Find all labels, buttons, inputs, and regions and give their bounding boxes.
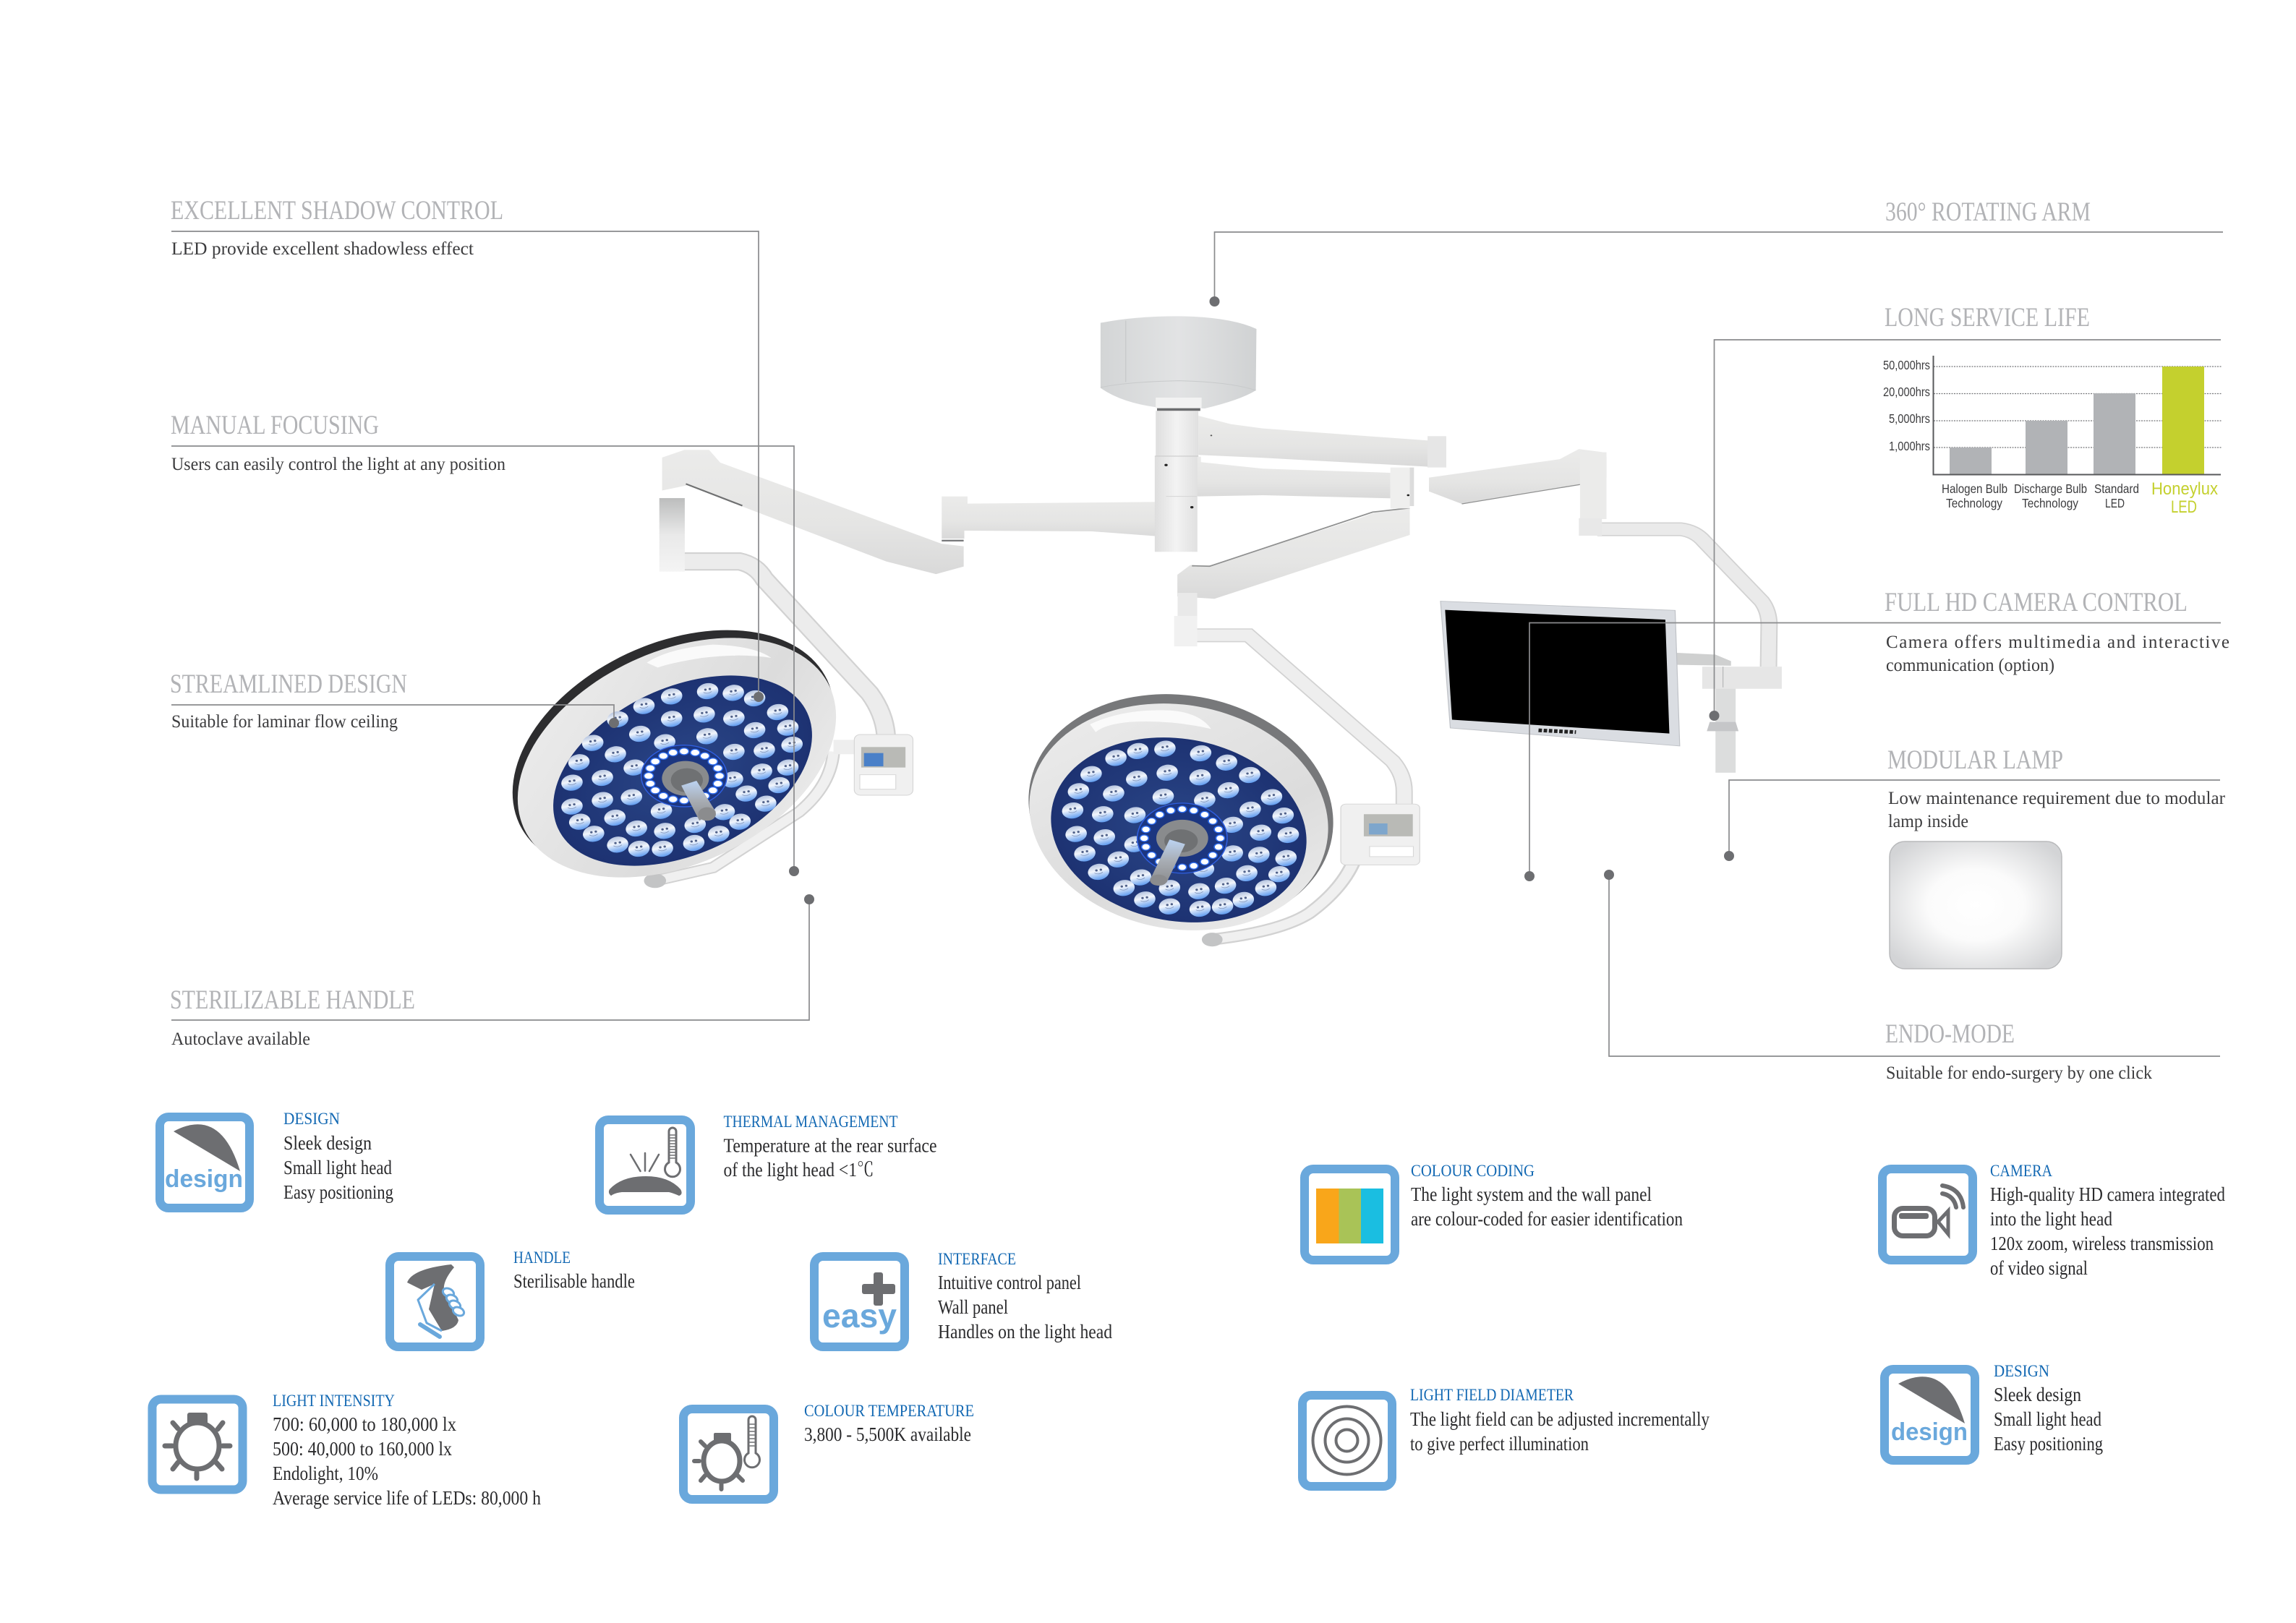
feature title: INTERFACE [938, 1250, 1016, 1268]
feature title: THERMAL MANAGEMENT [723, 1113, 898, 1131]
axis labels: 5,000hrs [1889, 411, 1930, 426]
feature title: DESIGN [1994, 1362, 2049, 1380]
leader line [1215, 232, 2223, 301]
feature text: Endolight, 10% [273, 1463, 378, 1484]
leader dot [1524, 871, 1535, 881]
feature text: The light field can be adjusted incrementally [1410, 1408, 1710, 1430]
callout: streamlined design [170, 669, 619, 732]
feature: colour coding [1305, 1162, 1683, 1260]
icon: handle [390, 1256, 480, 1347]
icon: design [160, 1117, 249, 1208]
feature text: The light system and the wall panel [1411, 1183, 1652, 1205]
callout: manual focusing [171, 411, 799, 876]
icon: light [152, 1400, 243, 1489]
feature: light intensity [152, 1392, 541, 1509]
feature text: Sleek design [283, 1132, 372, 1154]
chart axes [1934, 356, 2221, 474]
feature text: to give perfect illumination [1410, 1433, 1589, 1455]
feature: interface [814, 1250, 1112, 1347]
callout: sterilizable handle [170, 894, 814, 1049]
middle arm [1189, 457, 1391, 498]
leader line [1714, 340, 2221, 716]
callout: modular lamp [1724, 745, 2226, 969]
callout: full HD camera control [1524, 588, 2229, 881]
icon: thermal [599, 1120, 691, 1210]
leader dot [1209, 296, 1219, 307]
feature text: 3,800 - 5,500K available [804, 1423, 971, 1445]
description: Camera offers multimedia and interactive [1886, 633, 2229, 652]
modular lamp lens panel [1890, 842, 2062, 969]
callout: excellent shadow control [171, 196, 764, 702]
heading: 360° ROTATING ARM [1885, 197, 2091, 227]
description line two: communication (option) [1886, 656, 2054, 675]
feature: handle [390, 1249, 635, 1347]
heading: ENDO-MODE [1885, 1019, 2015, 1049]
leader line [171, 705, 614, 723]
monitor [1441, 601, 1680, 746]
category labels: Technology [2022, 496, 2078, 510]
feature: design (left) [160, 1110, 393, 1208]
LED array [1060, 710, 1301, 919]
feature text [938, 1272, 1112, 1342]
icon: colour swatches [1305, 1169, 1395, 1260]
leader dot [1604, 870, 1614, 880]
heading: MANUAL FOCUSING [171, 411, 379, 440]
category labels [1942, 479, 2218, 517]
feature title: HANDLE [513, 1249, 571, 1267]
axis labels: 1,000hrs [1889, 439, 1930, 453]
ceiling mount and central arms [942, 316, 1446, 599]
feature text [1411, 1183, 1683, 1230]
callout: long service life [1710, 303, 2222, 721]
feature: light field diameter [1302, 1386, 1710, 1486]
ceiling cap [1101, 316, 1256, 408]
feature text: Handles on the light head [938, 1321, 1112, 1342]
feature title: CAMERA [1990, 1162, 2052, 1180]
description: Suitable for endo-surgery by one click [1886, 1063, 2152, 1083]
feature text [1994, 1384, 2103, 1455]
axis labels: 20,000hrs [1883, 385, 1930, 399]
lower arm [1177, 508, 1410, 599]
LED array [559, 645, 805, 859]
feature title: LIGHT INTENSITY [273, 1392, 395, 1410]
callout: endo-mode [1604, 870, 2220, 1083]
description line two: lamp inside [1888, 812, 1968, 831]
feature text: Intuitive control panel [938, 1272, 1081, 1293]
leader dot [1724, 851, 1734, 861]
feature text [283, 1132, 393, 1203]
arm to monitor side [1429, 449, 1607, 504]
leader dot [1710, 711, 1720, 721]
feature text: 700: 60,000 to 180,000 lx [273, 1413, 456, 1435]
upper arm [1198, 416, 1441, 467]
yoke and control panel [1202, 804, 1420, 946]
feature text: into the light head [1990, 1208, 2112, 1230]
leader dot [789, 866, 799, 876]
description: Low maintenance requirement due to modular [1888, 789, 2226, 808]
axis labels: 50,000hrs [1883, 358, 1930, 372]
icon: colour temperature [683, 1409, 774, 1499]
leader dot [754, 692, 764, 702]
feature text [723, 1135, 937, 1181]
left arm [942, 497, 1156, 539]
heading: FULL HD CAMERA CONTROL [1885, 588, 2188, 617]
description: LED provide excellent shadowless effect [171, 239, 474, 259]
light disc [523, 637, 842, 904]
leader dot [609, 718, 619, 728]
right arm, monitor and lower tube [1174, 449, 1782, 808]
feature: camera [1882, 1162, 2225, 1279]
feature text: Sleek design [1994, 1384, 2081, 1405]
feature text: 120x zoom, wireless transmission [1990, 1233, 2214, 1254]
feature text: Sterilisable handle [513, 1270, 635, 1292]
upper left arm [660, 450, 964, 742]
feature text [1990, 1183, 2225, 1279]
category labels: LED [2105, 496, 2125, 510]
leader line [171, 899, 809, 1020]
feature text [1410, 1408, 1710, 1455]
icon: easy plus: easy [822, 1297, 897, 1335]
icon: concentric circles [1302, 1395, 1392, 1486]
lamp head two [1010, 671, 1420, 954]
feature title: COLOUR TEMPERATURE [804, 1402, 974, 1420]
feature text: are colour-coded for easier identification [1411, 1208, 1683, 1230]
heading: MODULAR LAMP [1887, 745, 2063, 775]
yoke and control panel [644, 735, 913, 888]
category labels: Halogen Bulb [1942, 481, 2007, 496]
feature text: Small light head [1994, 1408, 2101, 1430]
feature text: Temperature at the rear surface [723, 1135, 937, 1157]
heading: LONG SERVICE LIFE [1885, 303, 2090, 333]
icon: design: design [1891, 1418, 1968, 1446]
description: Users can easily control the light at any position [171, 455, 505, 474]
description: Suitable for laminar flow ceiling [171, 712, 398, 732]
category labels: Standard [2094, 481, 2139, 496]
category labels: Discharge Bulb [2014, 481, 2087, 496]
icon: design: design [165, 1165, 243, 1193]
category labels: Honeylux [2151, 479, 2218, 499]
leader line [1529, 623, 2221, 876]
leader line [1729, 780, 2220, 856]
light disc [1036, 718, 1321, 942]
category labels: LED [2171, 497, 2197, 517]
bar: standard LED [2094, 393, 2135, 474]
leader dot [804, 894, 814, 904]
feature: design (right) [1885, 1362, 2103, 1460]
lamp two post and tube [1177, 593, 1198, 620]
feature text: 500: 40,000 to 160,000 lx [273, 1438, 452, 1460]
lamp head one [474, 582, 913, 925]
column [1156, 411, 1198, 457]
callout: 360 rotating arm [1209, 197, 2223, 307]
feature text: Wall panel [938, 1296, 1008, 1318]
leader line [1609, 875, 2220, 1056]
category labels: Technology [1946, 496, 2002, 510]
feature: thermal management [599, 1113, 937, 1210]
feature title: COLOUR CODING [1411, 1162, 1535, 1180]
feature text: Average service life of LEDs: 80,000 h [273, 1487, 541, 1509]
feature text [273, 1413, 541, 1509]
monitor arm and camera stem [1677, 653, 1731, 666]
description: Autoclave available [171, 1029, 310, 1049]
feature title: DESIGN [283, 1110, 340, 1128]
leader line [171, 231, 759, 697]
bar chart: service life [1883, 356, 2222, 517]
feature text: Small light head [283, 1157, 392, 1178]
feature: colour temperature [683, 1402, 974, 1499]
surgical light illustration [474, 316, 1782, 954]
feature text: High-quality HD camera integrated [1990, 1183, 2225, 1205]
feature title: LIGHT FIELD DIAMETER [1410, 1386, 1574, 1404]
bar: discharge [2026, 421, 2067, 474]
icon: wireless camera [1882, 1169, 1973, 1260]
feature text: of video signal [1990, 1257, 2088, 1279]
axis labels [1883, 358, 1930, 453]
icon: design [1885, 1369, 1975, 1460]
heading: STERILIZABLE HANDLE [170, 985, 415, 1015]
bar: Honeylux LED [2162, 367, 2204, 474]
heading: EXCELLENT SHADOW CONTROL [171, 196, 503, 226]
heading: STREAMLINED DESIGN [170, 669, 407, 699]
feature text: Easy positioning [283, 1181, 393, 1203]
leader line [171, 446, 794, 871]
feature text: of the light head <1℃ [723, 1159, 874, 1181]
icon: easy plus [814, 1256, 905, 1347]
feature text: Easy positioning [1994, 1433, 2103, 1455]
bar: halogen [1950, 447, 1992, 474]
